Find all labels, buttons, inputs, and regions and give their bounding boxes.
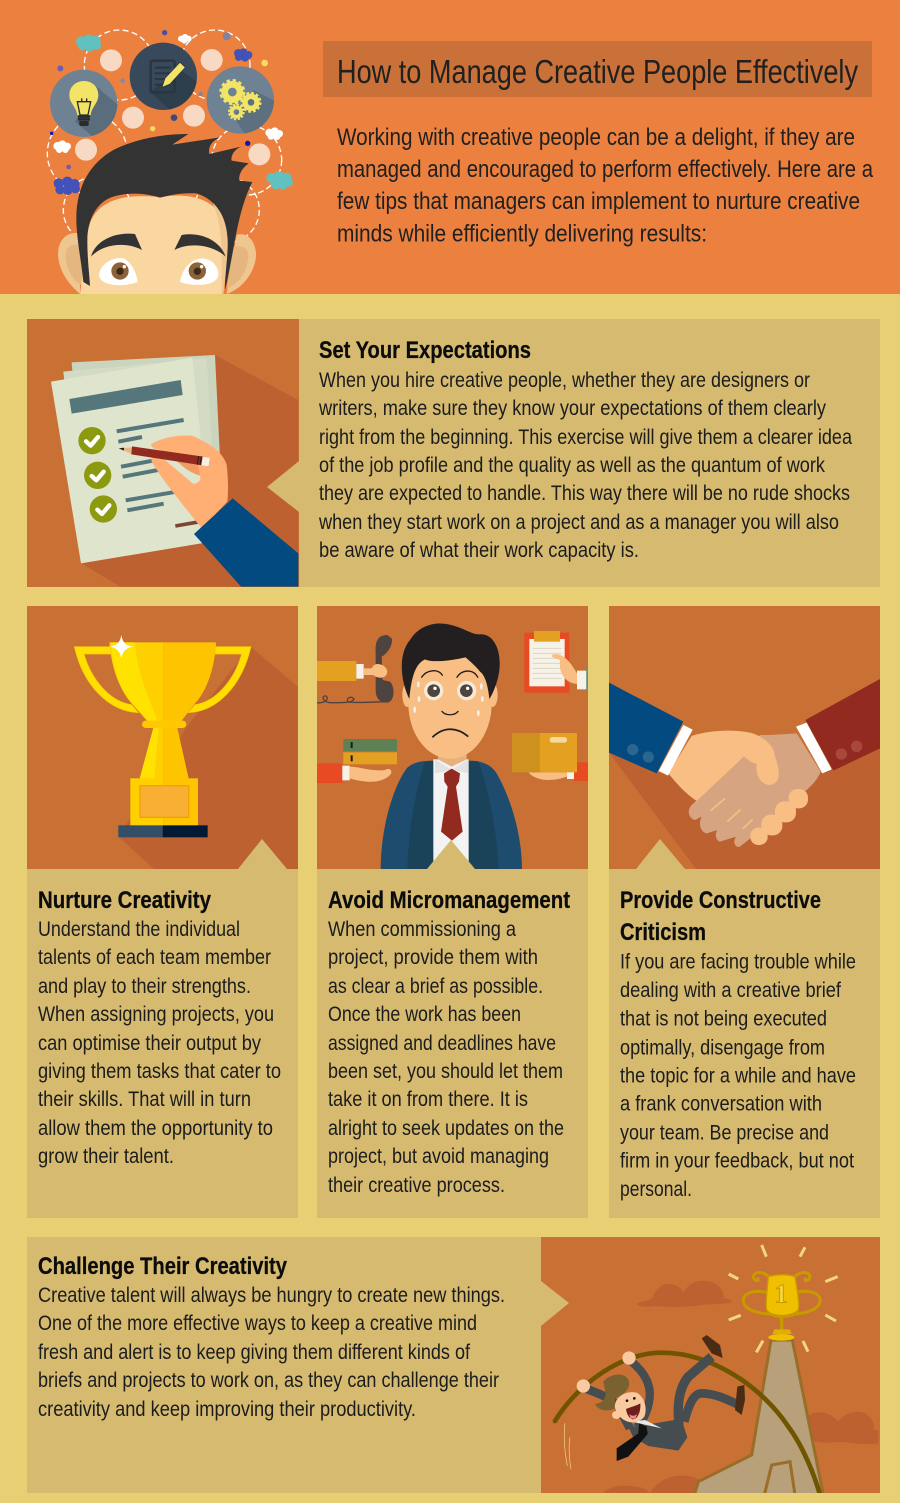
heading: Provide Constructive	[620, 887, 821, 914]
body text: writers, make sure they know your expectations of them clearly	[318, 397, 826, 420]
notch arrow	[267, 461, 299, 512]
body text: creativity and keep improving their productivity.	[38, 1398, 416, 1421]
heading: Challenge Their Creativity	[38, 1253, 288, 1280]
body text: project, provide them with	[328, 946, 538, 969]
panel: set your expectations	[27, 319, 880, 587]
heading: Avoid Micromanagement	[328, 887, 570, 914]
body text: be aware of what their work capacity is.	[319, 539, 639, 562]
illustration: golden trophy	[27, 606, 298, 870]
body text: allow them the opportunity to	[38, 1117, 273, 1140]
hand with box	[512, 733, 588, 781]
panel: provide constructive criticism	[609, 606, 880, 1218]
body text: Understand the individual	[38, 918, 240, 941]
body text	[318, 369, 852, 562]
man's face peeking up	[58, 134, 256, 294]
body text	[38, 1284, 505, 1421]
body text: grow their talent.	[38, 1145, 174, 1168]
panel: challenge their creativity	[27, 1237, 880, 1495]
businessman	[577, 1335, 745, 1461]
illustration: handshake	[609, 606, 880, 870]
hand with telephone	[317, 635, 394, 703]
body text: been set, you should let them	[328, 1060, 563, 1083]
body text: can optimise their output by	[38, 1032, 261, 1055]
notch arrow	[238, 839, 287, 869]
body text: One of the more effective ways to keep a creative mind	[38, 1312, 477, 1335]
body text: talents of each team member	[38, 946, 271, 969]
trophy number one	[729, 1245, 838, 1352]
illustration: checklist and writing hand	[27, 319, 299, 587]
body text: assigned and deadlines have	[328, 1032, 556, 1055]
body text: If you are facing trouble while	[620, 950, 856, 974]
illustration: pole vaulter reaching trophy	[541, 1237, 880, 1495]
body text: Once the work has been	[328, 1003, 521, 1026]
body text: giving them tasks that cater to	[38, 1060, 281, 1083]
illustration: stressed man surrounded by demands	[317, 606, 588, 870]
notch arrow	[636, 839, 685, 869]
hand with books	[317, 739, 397, 783]
body text: fresh and alert is to keep giving them different kinds of	[38, 1341, 470, 1364]
body text: briefs and projects to work on, as they can challenge their	[38, 1369, 499, 1392]
panel: avoid micromanagement	[317, 606, 588, 1218]
notch arrow	[541, 1281, 569, 1326]
body text: alright to seek updates on the	[328, 1117, 564, 1140]
body text: that is not being executed	[620, 1008, 827, 1030]
notch arrow	[427, 840, 475, 869]
body text: optimally, disengage from	[620, 1036, 825, 1060]
body text: their skills. That will in turn	[38, 1088, 251, 1111]
body text: project, but avoid managing	[328, 1145, 549, 1168]
body text: as clear a brief as possible.	[328, 975, 543, 998]
hand with clipboard	[524, 631, 588, 693]
panel: nurture creativity	[27, 606, 298, 1218]
body text	[620, 950, 856, 1201]
body text: dealing with a creative brief	[620, 979, 841, 1002]
heading: Nurture Creativity	[38, 887, 212, 914]
stressed man	[381, 623, 522, 870]
body text: and play to their strengths.	[38, 975, 251, 998]
body text: When commissioning a	[328, 918, 516, 941]
body text	[38, 918, 281, 1168]
heading	[620, 887, 821, 946]
body text: When you hire creative people, whether they are designers or	[319, 369, 810, 392]
body text	[328, 918, 564, 1197]
bending pole	[555, 1353, 820, 1495]
icon: gears	[207, 66, 277, 137]
body text: the topic for a while and have	[620, 1064, 856, 1088]
body text: When assigning projects, you	[38, 1003, 274, 1026]
body text: firm in your feedback, but not	[620, 1150, 854, 1172]
body text: take it on from there. It is	[328, 1088, 528, 1111]
body text: their creative process.	[328, 1174, 505, 1197]
heading: Set Your Expectations	[319, 337, 531, 364]
body text: personal.	[620, 1178, 692, 1201]
header band	[0, 0, 900, 294]
body text: your team. Be precise and	[620, 1122, 829, 1144]
title	[323, 41, 872, 97]
intro text: minds while efficiently delivering results:	[337, 220, 707, 248]
intro text	[337, 124, 874, 248]
icon: light bulb	[50, 70, 120, 140]
trophy number one: 1	[775, 1279, 788, 1308]
icon: document and pencil	[130, 43, 200, 113]
heading: Criticism	[620, 919, 706, 946]
body text: of the job profile and the quality as well as the quantum of work	[319, 454, 825, 477]
mountain peak	[694, 1340, 823, 1495]
illustration: thinking man with idea bubbles	[47, 30, 293, 294]
body text: a frank conversation with	[620, 1092, 822, 1116]
body text: Creative talent will always be hungry to create new things.	[38, 1284, 505, 1307]
